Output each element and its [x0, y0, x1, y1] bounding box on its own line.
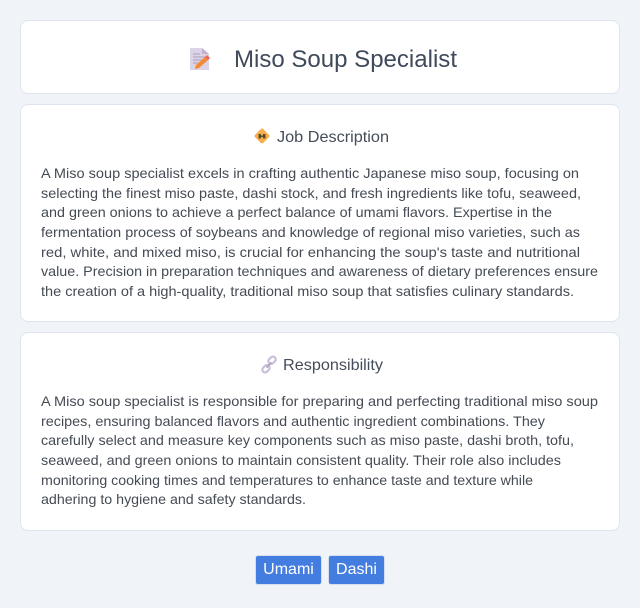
heading: responsibility: Responsibility — [283, 357, 383, 374]
text block: job description: value. Precision in preparation techniques and awareness of dietary preferences ensure — [41, 263, 598, 279]
text block: job description: fermentation process of soybeans and knowledge of regional miso varieties, such as — [41, 224, 580, 240]
text block: job description — [41, 165, 598, 299]
tag: Umami: Umami — [263, 561, 314, 578]
panel: title card — [20, 20, 620, 94]
text block: job description: and green onions to achieve a perfect balance of umami flavors. Expertise in the — [41, 204, 552, 220]
text block: job description: selecting the finest miso paste, dashi stock, and fresh ingredients like tofu, seaweed, — [41, 185, 581, 201]
heading: job description: Job Description — [277, 129, 389, 146]
text block: responsibility — [41, 393, 598, 507]
text block: responsibility: seaweed, and green onions to maintain consistent quality. Their role also includes — [41, 452, 561, 468]
panel: responsibility — [20, 332, 620, 531]
text block: responsibility: A Miso soup specialist is responsible for preparing and perfecting traditional miso soup — [41, 393, 598, 409]
panel: job description — [20, 104, 620, 322]
text block: job description: the creation of a high-quality, traditional miso soup that satisfies culinary standards. — [41, 283, 574, 299]
tag: Umami — [255, 555, 322, 585]
icon: chain link — [261, 356, 277, 374]
text block: job description: A Miso soup specialist excels in crafting authentic Japanese miso soup, focusing on — [41, 165, 579, 181]
text block: responsibility: monitoring cooking times and temperatures to enhance taste and texture while — [41, 472, 533, 488]
tag: Dashi: Dashi — [336, 561, 377, 578]
text block: responsibility: adhering to hygiene and safety standards. — [41, 491, 306, 507]
icon: document with pencil — [190, 48, 210, 70]
title: Miso Soup Specialist — [234, 46, 457, 73]
text block: job description: red, white, and mixed miso, is crucial for enhancing the soup's taste and nutritional — [41, 244, 580, 260]
icon: orange diamond — [254, 128, 270, 144]
text block: responsibility: carefully select and measure key components such as miso paste, dashi broth, tofu, — [41, 432, 574, 448]
tag: Dashi — [328, 555, 385, 585]
text block: responsibility: recipes, ensuring balanced flavors and authentic ingredient combinations. They — [41, 413, 545, 429]
